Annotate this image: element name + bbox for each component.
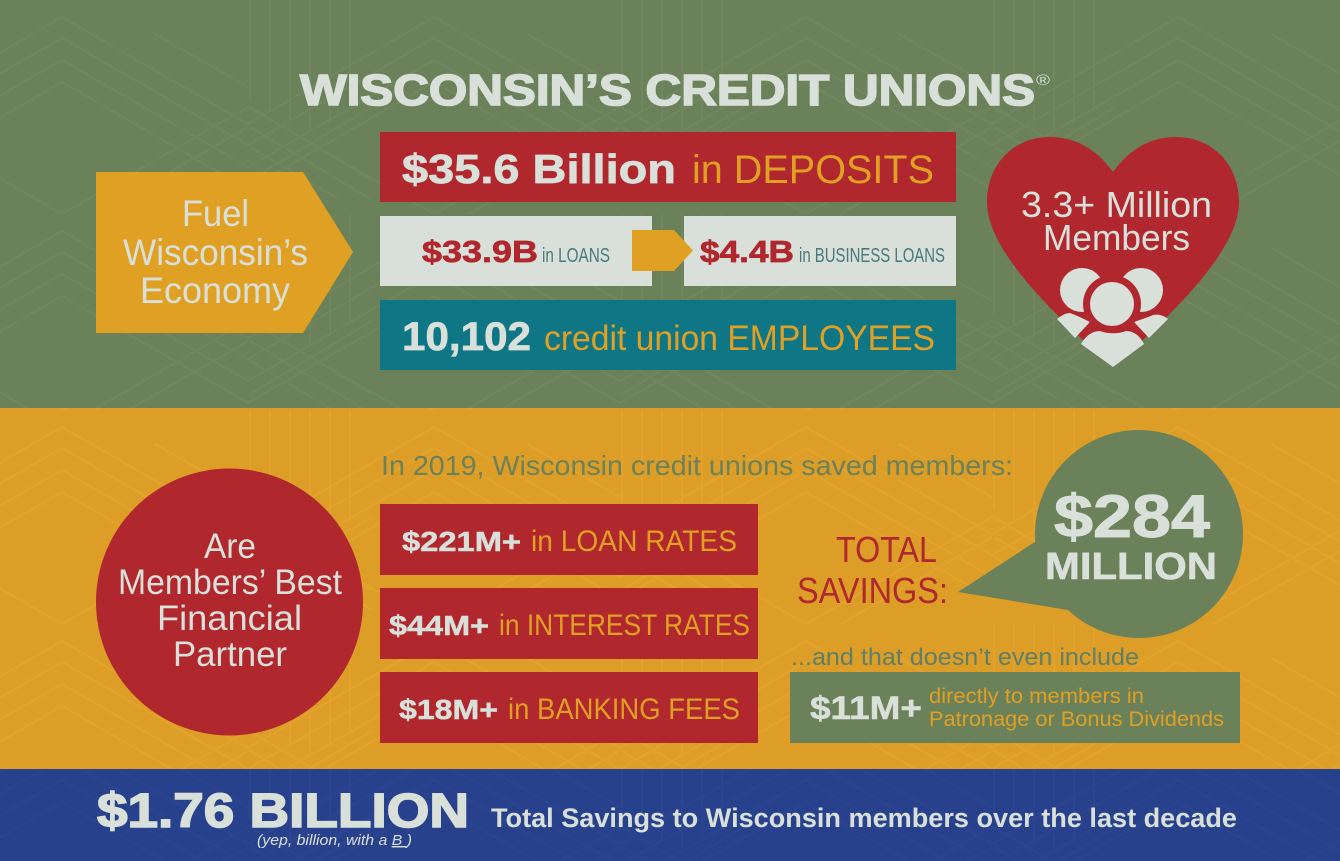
panel: business loans: [684, 216, 956, 286]
text: and that doesn't even include: ...and that doesn’t even include: [791, 644, 1139, 671]
title: ®: [1036, 72, 1050, 89]
panel: loan rates: in LOAN RATES: [531, 525, 737, 558]
panel: patronage and bonus dividends: directly to members in: [929, 685, 1144, 708]
panel: loans: $33.9B: [422, 234, 538, 269]
panel: best financial partner circle: Are: [204, 527, 256, 566]
text: 1.76 billion: $1.76 BILLION: [97, 785, 469, 838]
panel: members heart: [987, 137, 1239, 367]
panel: yellow savings section: [0, 408, 1340, 769]
panel: loan rates: $221M+: [402, 526, 521, 557]
text: 1.76 billion: (yep, billion, with a B ): [257, 833, 412, 849]
panel: patronage and bonus dividends: $11M+: [810, 690, 922, 726]
panel: employees: [380, 300, 956, 370]
callout: 284 million speech bubble: [958, 430, 1243, 638]
arrow: Fuel Wisconsin's Economy: Wisconsin’s: [123, 232, 308, 273]
panel: interest rates: in INTEREST RATES: [499, 609, 750, 642]
text: total savings label: SAVINGS:: [797, 570, 948, 611]
arrow: loans to business loans: [632, 230, 693, 271]
panel: loans: [380, 216, 652, 286]
panel: employees: credit union EMPLOYEES: [544, 319, 935, 358]
panel: business loans: in BUSINESS LOANS: [799, 245, 945, 267]
panel: employees: 10,102: [402, 315, 531, 359]
arrow: Fuel Wisconsin's Economy: Fuel: [182, 193, 249, 234]
panel: best financial partner circle: Partner: [173, 635, 287, 674]
panel: deposits: $35.6 Billion: [402, 146, 676, 192]
panel: blue decade savings band: [0, 769, 1340, 861]
callout: 284 million speech bubble: MILLION: [1045, 546, 1217, 588]
panel: best financial partner circle: [96, 468, 363, 736]
panel: loan rates: [380, 504, 758, 575]
text: total savings over the decade: Total Savings to Wisconsin members over the last decade: [491, 803, 1237, 833]
panel: patronage and bonus dividends: [790, 672, 1240, 743]
panel: deposits: in DEPOSITS: [692, 148, 934, 192]
panel: members heart: Members: [1043, 217, 1190, 258]
text: total savings label: [797, 529, 948, 611]
panel: business loans: $4.4B: [700, 234, 794, 269]
text: savings intro: In 2019, Wisconsin credit unions saved members:: [381, 450, 1013, 481]
panel: banking fees: $18M+: [399, 694, 498, 725]
panel: best financial partner circle: Financial: [157, 599, 302, 638]
callout: 284 million speech bubble: $284: [1054, 483, 1211, 550]
panel: banking fees: [380, 672, 758, 743]
arrow: Fuel Wisconsin's Economy: [96, 172, 353, 333]
text: total savings label: TOTAL: [836, 529, 937, 570]
panel: best financial partner circle: Members’ Best: [118, 563, 342, 602]
panel: deposits: [380, 132, 956, 202]
panel: green economy section: [0, 0, 1340, 408]
panel: patronage and bonus dividends: Patronage or Bonus Dividends: [929, 708, 1224, 731]
panel: members heart: 3.3+ Million: [1021, 184, 1212, 225]
panel: loans: in LOANS: [542, 245, 610, 267]
icon: group of members: [1057, 268, 1168, 367]
panel: interest rates: [380, 588, 758, 659]
panel: interest rates: $44M+: [389, 610, 489, 641]
panel: banking fees: in BANKING FEES: [508, 693, 740, 726]
arrow: Fuel Wisconsin's Economy: Economy: [140, 270, 290, 311]
title: WISCONSIN’S CREDIT UNIONS: [300, 66, 1035, 115]
